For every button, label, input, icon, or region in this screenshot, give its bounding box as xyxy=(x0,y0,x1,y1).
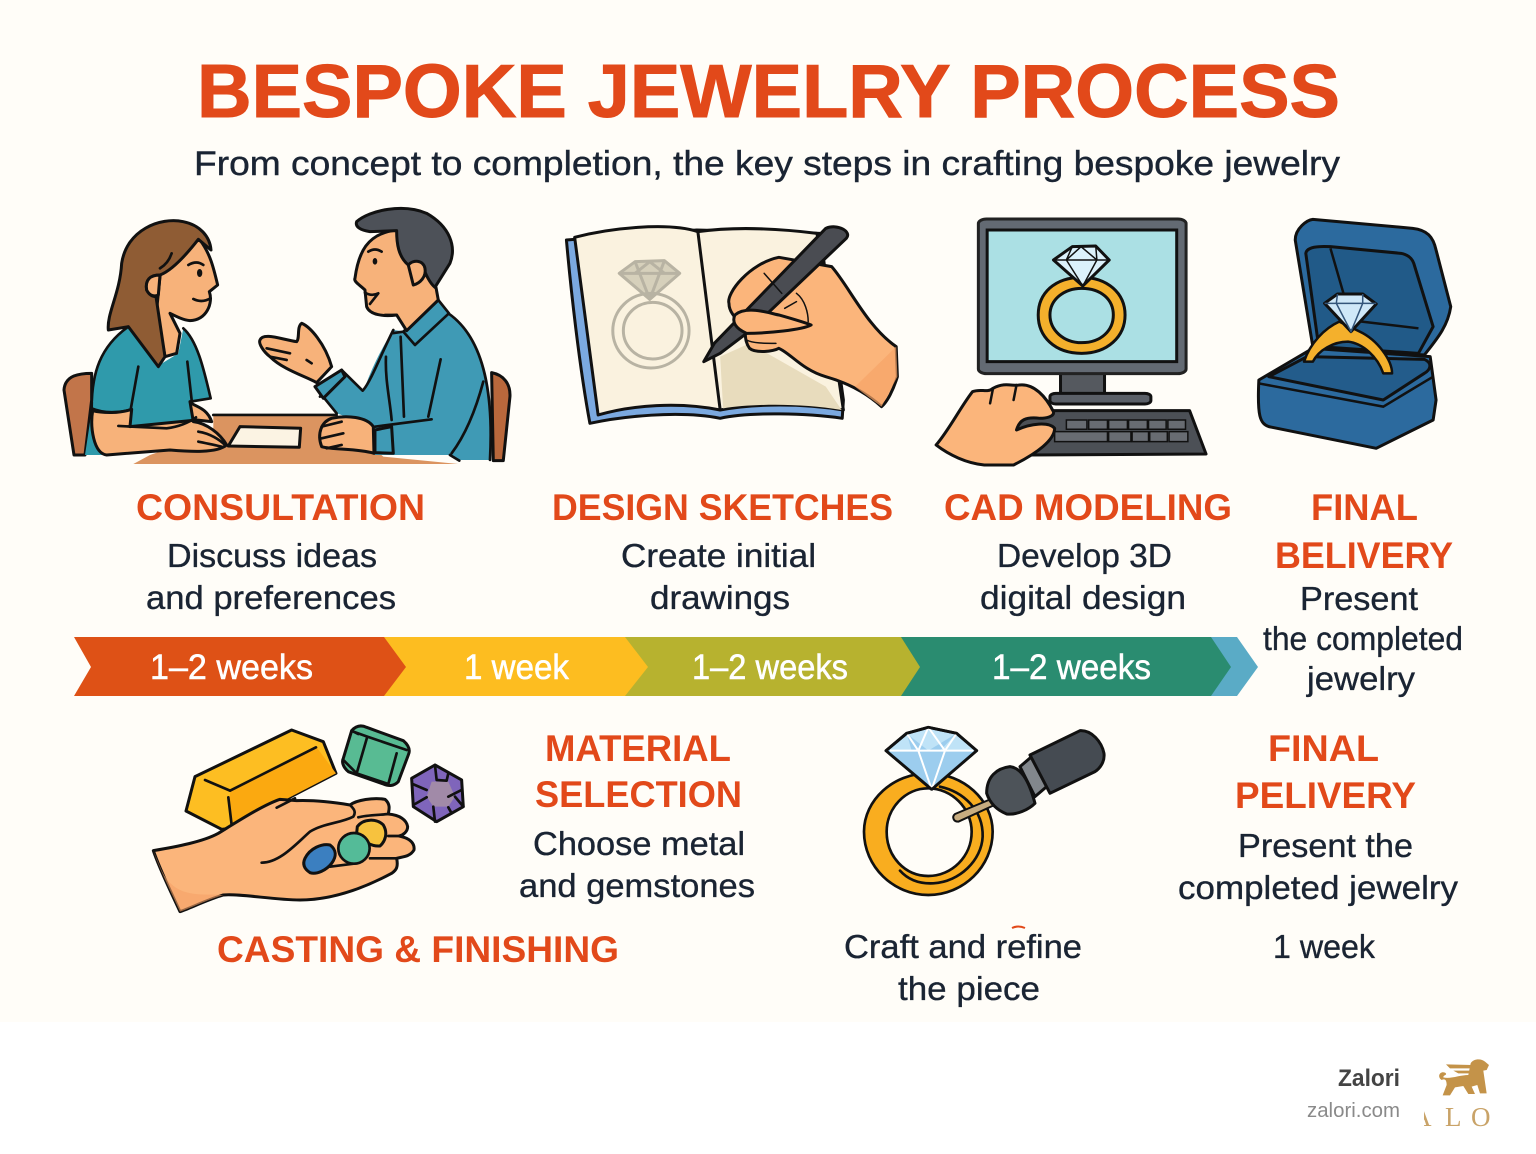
text: casting and finishing description xyxy=(844,926,1082,1007)
text: design sketches description: drawings xyxy=(650,579,790,616)
label: duration 4: 1–2 weeks xyxy=(992,648,1151,687)
subtitle: From concept to completion, the key steps in crafting bespoke jewelry xyxy=(194,145,1340,183)
icon: ring in open blue jewelry box xyxy=(1258,219,1451,448)
text: final pelivery description: Present the xyxy=(1238,827,1413,864)
text: final belivery description xyxy=(1263,580,1463,697)
arrow segment: olive xyxy=(620,637,920,696)
heading: material selection: MATERIAL xyxy=(545,728,731,769)
label: duration 2: 1 week xyxy=(464,648,569,687)
heading: final pelivery xyxy=(1235,728,1416,816)
timeline arrow bar xyxy=(74,637,1258,696)
text: final pelivery description: completed jewelry xyxy=(1178,869,1459,906)
text: material selection description xyxy=(519,825,755,904)
arrow tip: blue xyxy=(1205,637,1258,696)
icon: computer monitor with ring on CAD screen xyxy=(936,219,1206,465)
text: final pelivery description xyxy=(1178,827,1459,906)
heading: casting and finishing: CASTING & FINISHING xyxy=(217,929,619,970)
text: design sketches description xyxy=(621,537,816,616)
icon: hand with gold bar and gemstones xyxy=(153,726,463,912)
logo: clipped wordmark: O xyxy=(1471,1102,1490,1132)
logo: clipped wordmark: L xyxy=(1445,1102,1462,1132)
title: BESPOKE JEWELRY PROCESS xyxy=(197,49,1340,133)
heading: final belivery xyxy=(1275,487,1453,576)
heading: design sketches: DESIGN SKETCHES xyxy=(552,487,893,528)
heading: material selection xyxy=(535,728,742,815)
text: design sketches description: Create initial xyxy=(621,537,816,574)
text: consultation description xyxy=(146,537,396,616)
heading: final belivery: BELIVERY xyxy=(1275,535,1453,576)
text: consultation description: Discuss ideas xyxy=(167,537,377,574)
brand url: zalori.com xyxy=(1307,1100,1400,1122)
text: cad modeling description xyxy=(980,537,1186,616)
logo: clipped wordmark xyxy=(1424,1108,1490,1126)
arrow segment: red xyxy=(74,637,406,696)
text: material selection description: Choose metal xyxy=(533,825,745,862)
text: consultation description: and preferences xyxy=(146,579,396,616)
text: cad modeling description: Develop 3D xyxy=(997,537,1172,574)
text: final belivery description: jewelry xyxy=(1306,660,1416,697)
arrow segment: yellow xyxy=(380,637,648,696)
heading: consultation: CONSULTATION xyxy=(136,487,425,528)
text: casting and finishing description: Craft and refine xyxy=(844,928,1082,965)
icon: gold ring with diamond and polishing tool xyxy=(864,727,1104,895)
heading: final pelivery: PELIVERY xyxy=(1235,775,1416,816)
heading: final belivery: FINAL xyxy=(1311,487,1418,528)
logo: winged lion xyxy=(1439,1059,1489,1095)
heading: final pelivery: FINAL xyxy=(1268,728,1379,769)
text: final duration: 1 week xyxy=(1273,928,1375,965)
text: final belivery description: Present xyxy=(1300,580,1418,617)
heading: material selection: SELECTION xyxy=(535,774,742,815)
logo: clipped wordmark: A xyxy=(1412,1102,1432,1132)
label: duration 3: 1–2 weeks xyxy=(692,648,848,687)
icon: consultation, two people at a table xyxy=(64,208,510,464)
heading: cad modeling: CAD MODELING xyxy=(944,487,1232,528)
label: duration 1: 1–2 weeks xyxy=(150,648,313,687)
text: final belivery description: the completed xyxy=(1263,620,1463,657)
arrow segment: green xyxy=(895,637,1231,696)
text: casting and finishing description: the piece xyxy=(898,970,1040,1007)
text: material selection description: and gemstones xyxy=(519,867,755,904)
brand name: Zalori xyxy=(1338,1065,1400,1092)
icon: sketchbook with hand and pen xyxy=(566,227,897,423)
text: cad modeling description: digital design xyxy=(980,579,1186,616)
